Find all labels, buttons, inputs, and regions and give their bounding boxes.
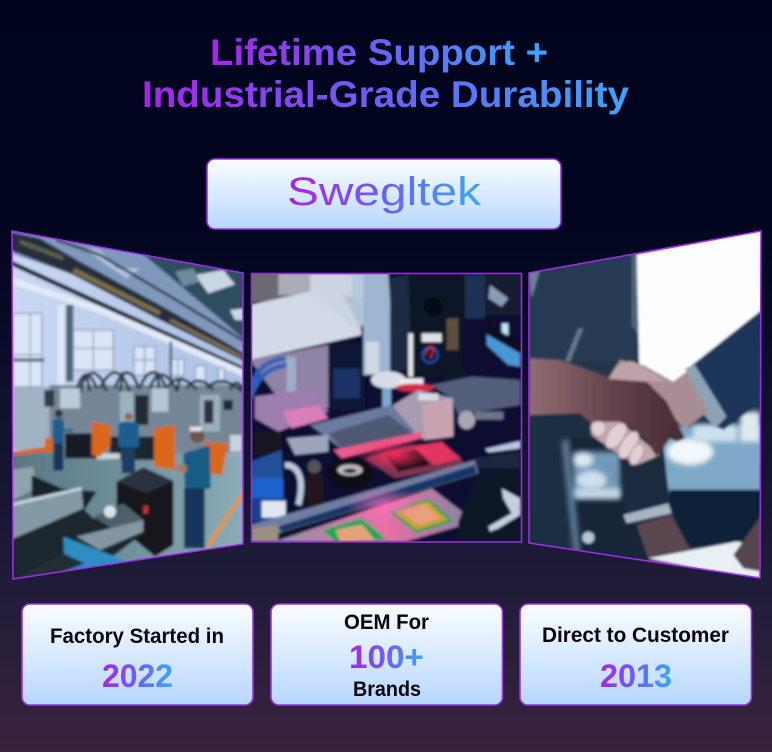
photo frame: factory floor xyxy=(12,231,243,579)
photo frame: business handshake xyxy=(529,231,761,578)
right hand xyxy=(690,310,762,430)
card: factory started xyxy=(22,604,253,705)
left arm xyxy=(529,358,685,457)
title xyxy=(142,32,629,115)
photo: factory floor xyxy=(12,232,242,578)
card: factory started: Factory Started in xyxy=(50,625,224,648)
card: direct to customer: 2013 xyxy=(600,658,672,694)
photo: chip assembly machine xyxy=(252,274,521,542)
card: factory started: 2022 xyxy=(102,658,173,694)
card: OEM brands xyxy=(271,604,502,705)
fingers base xyxy=(592,422,660,465)
card: OEM brands: 100+ xyxy=(349,639,424,675)
card: direct to customer: Direct to Customer xyxy=(542,624,729,647)
title: Industrial-Grade Durability xyxy=(142,74,629,115)
logo panel: Swegltek: Swegltek xyxy=(287,170,482,214)
card: OEM brands: OEM For xyxy=(344,611,429,634)
logo panel: Swegltek xyxy=(207,159,561,229)
title: Lifetime Support + xyxy=(210,32,548,73)
card: OEM brands: Brands xyxy=(353,678,421,701)
worker figures xyxy=(53,410,211,548)
photo: business handshake xyxy=(530,232,760,578)
photo frame: chip assembly machine xyxy=(252,274,522,542)
card: direct to customer xyxy=(520,604,752,705)
machine cabling xyxy=(75,372,243,398)
